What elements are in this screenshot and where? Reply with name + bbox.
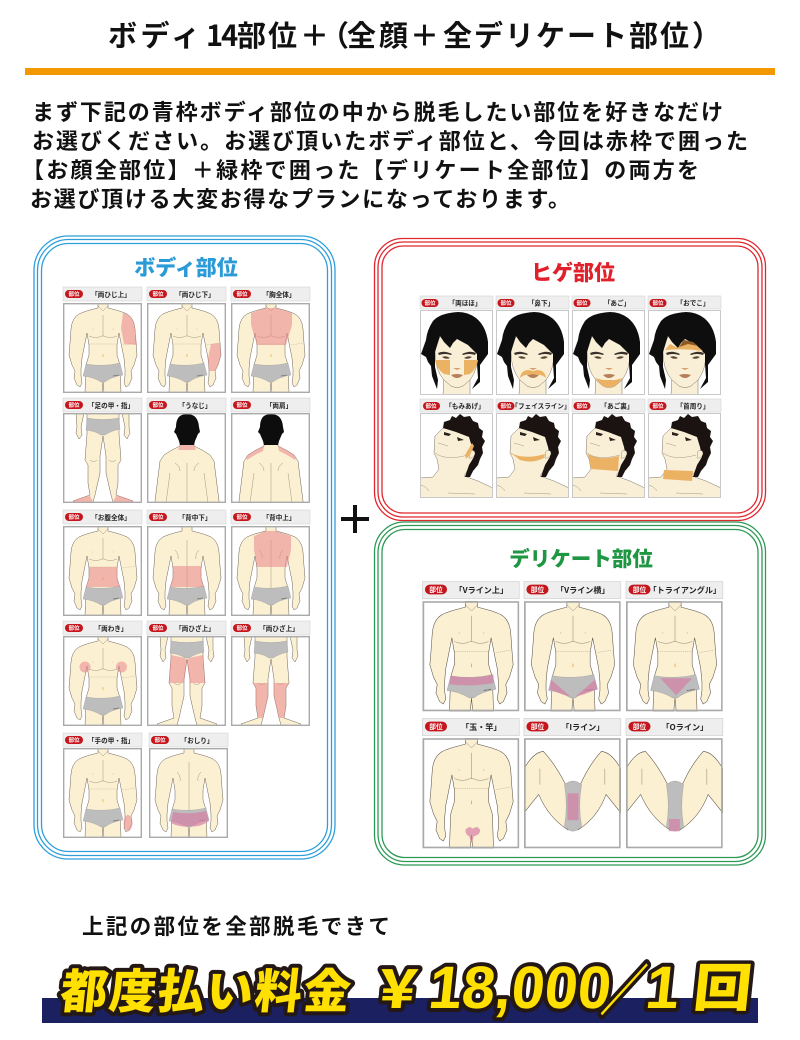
heading: デリケート部位: デリケート部位 [509,542,653,572]
card: フェイスライン: 部位 [500,402,512,410]
card: Vライン横: 「Vライン横」 [556,585,610,596]
title: 全デリケート部位 [443,13,691,55]
card: 鼻下 [496,296,569,395]
card: おしり: 「おしり」 [181,735,213,745]
card: 背中上 [231,510,310,616]
card: おしり [149,733,228,838]
card: 両ひじ上 [63,287,142,393]
card: あご: 部位 [576,299,588,307]
card: 両肩: 「両肩」 [266,400,292,410]
card: 手の甲・指: 「手の甲・指」 [88,735,134,745]
card: 玉・竿 [422,718,519,848]
card: 両ほほ: 部位 [424,299,436,307]
title: 部位 [237,13,299,55]
caption above price: 上記の部位を全部脱毛できて [82,910,390,941]
intro text block: 【お顔全部位】＋緑枠で囲った【デリケート全部位】の両方を [22,153,699,185]
panel: デリケート部位 [374,522,766,865]
card: おでこ: 部位 [652,299,664,307]
card: 胸全体: 「胸全体」 [263,289,295,299]
card: 両肩: 部位 [236,401,248,409]
card: 両ひじ下 [147,287,226,393]
card: 手の甲・指 [63,733,142,838]
card: Iライン: 「Iライン」 [561,722,604,733]
card: Oライン: 部位 [633,721,646,731]
card: 背中上: 「背中上」 [263,512,295,522]
card: 背中下: 部位 [152,513,164,521]
card: Oライン: 「Oライン」 [661,722,708,733]
heading: ボディ部位: ボディ部位 [134,252,238,282]
card: Vライン横: 部位 [531,584,544,594]
card: お腹全体: 「お腹全体」 [91,512,131,522]
intro text block [22,95,748,214]
card: 両ほほ: 「両ほほ」 [449,298,481,308]
price amount: 18,000 [426,954,615,1021]
card: 胸全体 [231,287,310,393]
card: 両ひざ上 [147,621,226,726]
card: 手の甲・指: 部位 [68,736,80,744]
card: あご裏: 部位 [576,402,588,410]
card: 首周り [648,399,721,498]
card: 両ひざ上 (下腿) [231,621,310,726]
intro text block: まず下記の青枠ボディ部位の中から脱毛したい部位を好きなだけ [32,95,723,127]
card: 両ひじ下: 部位 [152,290,164,298]
card: もみあげ [420,399,493,498]
card: 両わき: 「両わき」 [95,623,127,633]
card: あご: 「あご」 [604,298,630,308]
card: 両ひざ上 (下腿): 部位 [236,624,248,632]
title: ＋ [300,13,329,55]
panel: ボディ部位 [34,236,335,859]
card: 両ひざ上: 部位 [152,624,164,632]
title: 14 [206,13,238,55]
card: 両ひざ上 (下腿): 「両ひざ上」 [259,623,299,633]
card: うなじ: 部位 [152,401,164,409]
card: 両ひじ上: 「両ひじ上」 [91,289,131,299]
card: Iライン [524,718,621,848]
card: 鼻下: 部位 [500,299,512,307]
card: 足の甲・指: 「足の甲・指」 [88,400,134,410]
card: あご [572,296,645,395]
card: お腹全体: 部位 [68,513,80,521]
card: Iライン: 部位 [531,721,544,731]
price amount: ／ [598,948,651,1026]
card: 両わき: 部位 [68,624,80,632]
card: おでこ [648,296,721,395]
card: フェイスライン [496,399,571,498]
card: うなじ [147,398,226,503]
card: もみあげ: 「もみあげ」 [445,400,485,410]
card: Vライン上 [422,582,519,711]
card: うなじ: 「うなじ」 [179,400,211,410]
title: ボディ [108,13,203,55]
card: Vライン横 [524,582,621,711]
card: フェイスライン: 「フェイスライン」 [511,400,571,410]
card: 玉・竿: 「玉・竿」 [461,722,501,733]
card: おしり: 部位 [154,736,166,744]
price amount [368,946,756,1026]
card: 両肩 [231,398,310,503]
card: 両ひじ上: 部位 [68,290,80,298]
title: （ [320,13,349,55]
card: 背中下: 「背中下」 [179,512,211,522]
card: Vライン上: 「Vライン上」 [455,585,508,596]
card: Oライン [626,718,723,848]
intro text block: お選びください。お選び頂いたボディ部位と、今回は赤枠で囲った [32,124,748,156]
card: 足の甲・指: 部位 [68,401,80,409]
card: 両ほほ [420,296,493,395]
card: 胸全体: 部位 [236,290,248,298]
card: 首周り: 「首周り」 [677,400,709,410]
price label: 都度払い料金: 都度払い料金 [58,953,355,1022]
card: トライアングル [626,582,723,711]
card: お腹全体 [63,510,142,616]
title: ＋ [410,13,439,55]
title: ） [692,13,721,55]
card: 両ひじ下: 「両ひじ下」 [175,289,215,299]
price amount: 1 [643,954,683,1021]
card: トライアングル: 「トライアングル」 [649,585,721,596]
card: 鼻下: 「鼻下」 [528,298,554,308]
card: 背中下 [147,510,226,616]
card: トライアングル: 部位 [633,584,646,594]
title: 全顔 [347,13,411,55]
plus sign [341,505,369,533]
heading: ヒゲ部位: ヒゲ部位 [531,257,615,287]
card: 両わき [63,621,142,726]
price amount: 回 [690,946,756,1021]
card: おでこ: 「おでこ」 [677,298,709,308]
card: Vライン上: 部位 [429,584,443,594]
intro text block: お選び頂ける大変お得なプランになっております。 [30,182,570,214]
panel: ヒゲ部位 [374,238,766,520]
card: 足の甲・指 [63,398,142,503]
price amount: ￥ [368,949,428,1024]
card: あご裏: 「あご裏」 [601,400,633,410]
orange divider bar [25,68,775,75]
card: 玉・竿: 部位 [429,721,443,731]
card: 首周り: 部位 [652,402,664,410]
navy bar [42,998,758,1023]
card: もみあげ: 部位 [425,402,437,410]
card: あご裏 [572,399,645,498]
card: 両ひざ上: 「両ひざ上」 [175,623,215,633]
card: 背中上: 部位 [236,513,248,521]
price banner [42,946,758,1026]
